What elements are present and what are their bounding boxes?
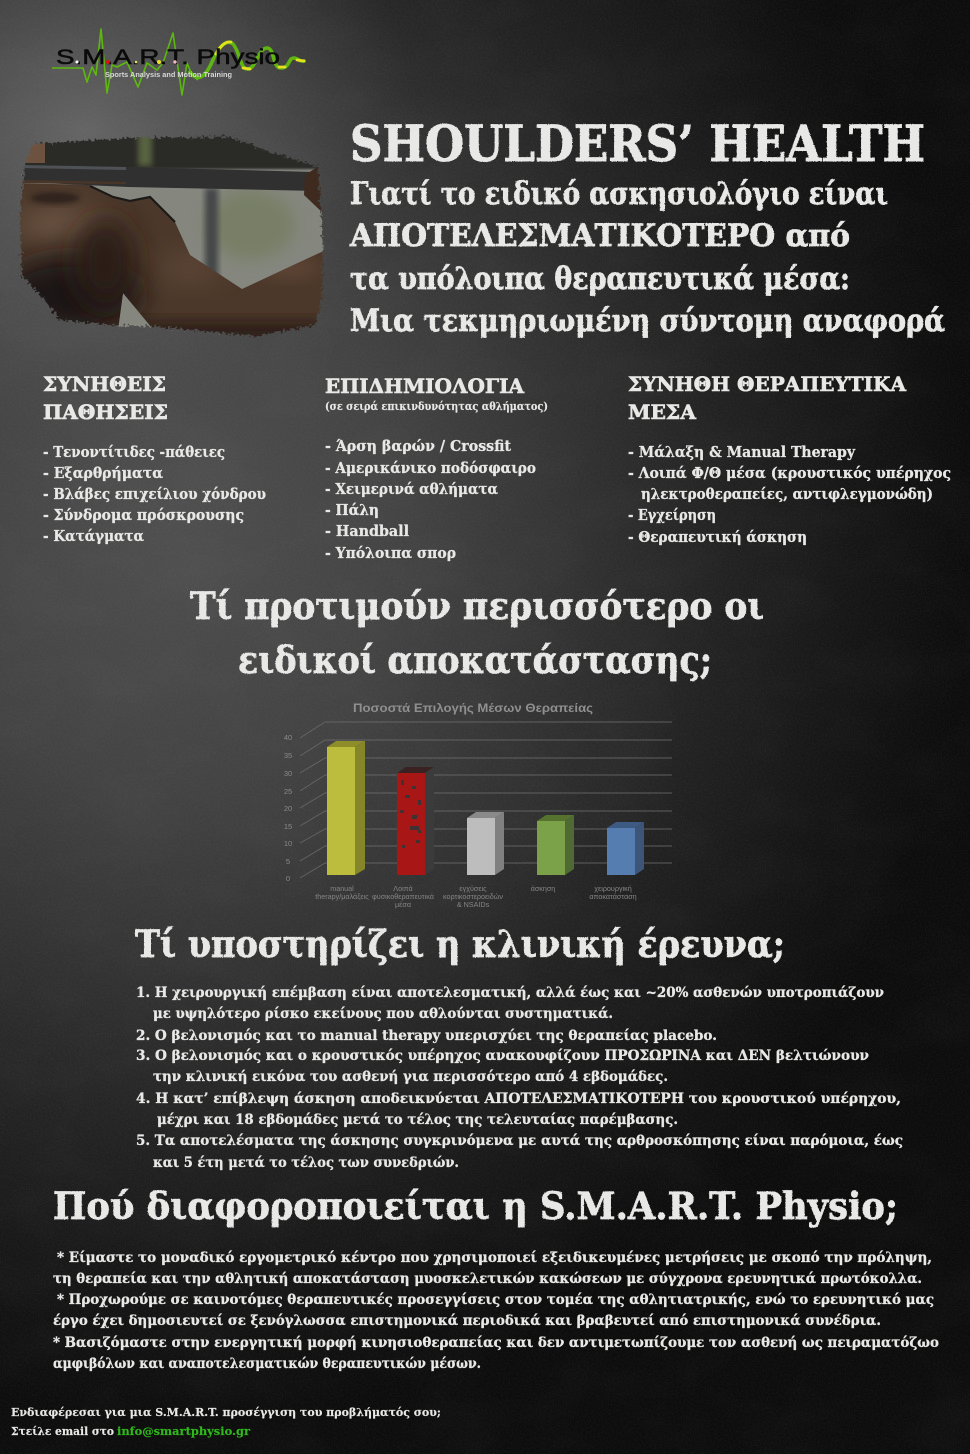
x axis labels: Λοιπά — [393, 884, 413, 893]
logo ECG line — [52, 29, 198, 95]
column: common treatments — [628, 372, 951, 546]
bar chart: treatment selection percentages — [284, 703, 672, 909]
sports list: - Άρση βαρών / Crossfit — [325, 437, 511, 455]
column sub-heading: (σε σειρά επικινδυνότητας αθλήματος) — [325, 400, 548, 413]
contact email: info@smartphysio.gr — [117, 1424, 251, 1438]
differentiators paragraph: αμφιβόλων και αναποτελεσματικών θεραπευτικών μέσων. — [53, 1356, 481, 1372]
subtitle: τα υπόλοιπα θεραπευτικά μέσα: — [350, 261, 850, 297]
x axis labels: κορτικοστεροειδών — [443, 892, 503, 901]
bar: other physio modalities — [397, 767, 434, 875]
heading: how S.M.A.R.T. Physio differs: Πού διαφοροποιείται η S.M.A.R.T. Physio; — [53, 1184, 898, 1228]
x axis labels: άσκηση — [531, 884, 555, 893]
y axis labels: 10 — [284, 839, 292, 848]
y axis labels: 20 — [284, 804, 292, 813]
bar: manual therapy — [327, 741, 365, 875]
conditions list: - Σύνδρομα πρόσκρουσης — [43, 506, 244, 524]
chart title: Ποσοστά Επιλογής Μέσων Θεραπείας — [353, 703, 593, 715]
x axis labels: μέσα — [395, 900, 411, 909]
numbered research findings: με υψηλότερο ρίσκο εκείνους που αθλούνται συστηματικά. — [153, 1005, 613, 1022]
numbered research findings: 1. Η χειρουργική επέμβαση είναι αποτελεσματική, αλλά έως και ~20% ασθενών υποτροπιάζουν — [136, 984, 884, 1001]
y axis labels: 25 — [284, 787, 292, 796]
numbered research findings: και 5 έτη μετά το τέλος των συνεδριών. — [153, 1155, 459, 1171]
differentiators paragraph: τη θεραπεία και την αθλητική αποκατάσταση μυοσκελετικών κακώσεων με σύγχρονα ερευνητικά πρωτόκολλα. — [53, 1270, 922, 1287]
sports list: - Αμερικάνικο ποδόσφαιρο — [325, 459, 536, 477]
sports list: - Πάλη — [325, 501, 379, 519]
x axis labels: εγχύσεις — [459, 884, 487, 893]
column heading — [628, 372, 906, 424]
y axis labels: 0 — [286, 874, 290, 883]
treatments list: - Θεραπευτική άσκηση — [628, 528, 807, 546]
differentiators paragraph: * Βασιζόμαστε στην ενεργητική μορφή κινησιοθεραπείας και δεν αντιμετωπίζουμε τον ασθενή ως πειραματόζωο — [53, 1334, 939, 1351]
x axis labels: φυσικοθεραπευτικά — [372, 892, 434, 901]
treatments list: - Μάλαξη & Manual Therapy — [628, 443, 856, 461]
conditions list: - Βλάβες επιχείλιου χόνδρου — [43, 485, 266, 503]
numbered research findings: 5. Τα αποτελέσματα της άσκησης συγκρινόμενα με αυτά της αρθροσκόπησης είναι παρόμοια, έως — [136, 1132, 903, 1149]
bar: injections — [467, 812, 504, 875]
heading: what specialists prefer: ειδικοί αποκατάστασης; — [238, 638, 712, 682]
logo tagline: Sports Analysis and Motion Training — [105, 72, 232, 79]
conditions list — [43, 443, 266, 545]
y axis labels: 40 — [284, 733, 292, 742]
x axis labels — [315, 884, 637, 909]
chart gridlines — [300, 722, 672, 878]
y axis labels — [284, 733, 292, 883]
bar: exercise — [537, 815, 574, 875]
subtitle: ΑΠΟΤΕΛΕΣΜΑΤΙΚΟΤΕΡΟ από — [349, 218, 850, 254]
numbered research findings: 4. Η κατ’ επίβλεψη άσκηση αποδεικνύεται ΑΠΟΤΕΛΕΣΜΑΤΙΚΟΤΕΡΗ του κρουστικού υπέρηχου, — [136, 1090, 901, 1107]
numbered research findings: 3. Ο βελονισμός και ο κρουστικός υπέρηχος ανακουφίζουν ΠΡΟΣΩΡΙΝΑ και ΔΕΝ βελτιώνουν — [136, 1047, 869, 1064]
x axis labels: αποκατάσταση — [589, 892, 637, 901]
logo ribbon wave — [190, 42, 304, 77]
subtitle: Γιατί το ειδικό ασκησιολόγιο είναι — [350, 176, 888, 212]
y axis labels: 30 — [284, 769, 292, 778]
photo: athlete shoulder under barbell — [18, 134, 325, 338]
heading: what clinical research supports: Τί υποστηρίζει η κλινική έρευνα; — [135, 922, 785, 966]
numbered research findings: μέχρι και 18 εβδομάδες μετά το τέλος της τελευταίας παρέμβασης. — [157, 1111, 678, 1128]
y axis labels: 15 — [284, 822, 292, 831]
conditions list: - Κατάγματα — [43, 527, 144, 545]
conditions list: - Τενοντίτιδες -πάθειες — [43, 443, 225, 461]
differentiators paragraph: * Προχωρούμε σε καινοτόμες θεραπευτικές προσεγγίσεις στον τομέα της αθλητιατρικής, ενώ το ερευνητικό μας — [57, 1291, 934, 1308]
footer contact call to action: Ενδιαφέρεσαι για μια S.M.A.R.T. προσέγγιση του προβλήματός σου; — [11, 1405, 441, 1419]
logo wordmark: S.M.A.R.T. Physio — [56, 46, 280, 69]
footer contact call to action — [11, 1405, 441, 1438]
sports list — [325, 437, 536, 562]
numbered research findings: την κλινική εικόνα του ασθενή για περισσότερο από 4 εβδομάδες. — [153, 1069, 668, 1085]
column heading: ΣΥΝΗΘΗ ΘΕΡΑΠΕΥΤΙΚΑ — [628, 372, 906, 396]
conditions list: - Εξαρθρήματα — [43, 464, 163, 482]
column heading — [43, 372, 168, 424]
column heading: ΕΠΙΔΗΜΙΟΛΟΓΙΑ — [325, 374, 524, 398]
sports list: - Υπόλοιπα σπορ — [325, 544, 456, 562]
numbered research findings — [136, 984, 903, 1171]
x axis labels: manual — [330, 884, 354, 893]
y axis labels: 35 — [284, 751, 292, 760]
bar: surgical rehabilitation — [607, 822, 644, 875]
treatments list: - Λοιπά Φ/Θ μέσα (κρουστικός υπέρηχος — [628, 464, 951, 482]
column heading: ΣΥΝΗΘΕΙΣ — [43, 372, 166, 396]
x axis labels: χειρουργική — [594, 884, 632, 893]
heading: what specialists prefer — [190, 584, 764, 682]
sports list: - Handball — [325, 522, 409, 540]
treatments list: - Εγχείρηση — [628, 506, 716, 524]
differentiators paragraph: έργο έχει δημοσιευτεί σε ξενόγλωσσα επιστημονικά περιοδικά και βραβευτεί από επιστημονικά συνέδρια. — [53, 1312, 881, 1329]
treatments list: ηλεκτροθεραπείες, αντιφλεγμονώδη) — [641, 485, 933, 503]
differentiators paragraph — [53, 1249, 939, 1372]
y axis labels: 5 — [286, 857, 290, 866]
column: epidemiology — [325, 374, 548, 562]
x axis labels: & NSAIDs — [457, 900, 490, 909]
sports list: - Χειμερινά αθλήματα — [325, 480, 498, 498]
column heading: ΜΕΣΑ — [628, 400, 696, 424]
footer contact call to action: Στείλε email στο — [11, 1424, 114, 1438]
treatments list — [628, 443, 951, 546]
logo coloured dots — [76, 60, 177, 64]
column heading: ΠΑΘΗΣΕΙΣ — [43, 400, 168, 424]
heading: what specialists prefer: Τί προτιμούν περισσότερο οι — [190, 584, 764, 628]
differentiators paragraph: * Είμαστε το μοναδικό εργομετρικό κέντρο που χρησιμοποιεί εξειδικευμένες μετρήσεις με σκοπό την πρόληψη, — [57, 1249, 932, 1266]
numbered research findings: 2. Ο βελονισμός και το manual therapy υπερισχύει της θεραπείας placebo. — [136, 1027, 717, 1044]
x axis labels: therapy/μαλάξεις — [315, 892, 369, 901]
logo: S.M.A.R.T. Physio — [52, 29, 304, 95]
subtitle — [349, 176, 945, 339]
column: common conditions — [43, 372, 266, 545]
